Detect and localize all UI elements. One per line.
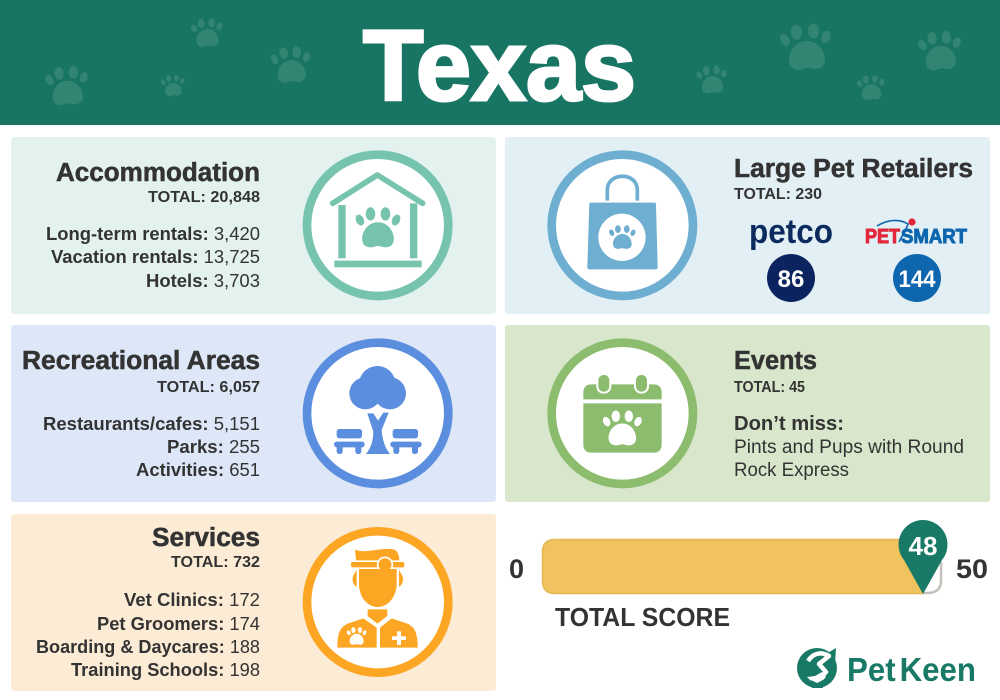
- logo: petsmart: SMART: [901, 226, 967, 248]
- logo mark: [797, 648, 837, 690]
- icon: tree and benches: [307, 343, 448, 484]
- icon: dog house: [307, 155, 448, 296]
- list: services: Training Schools: 198: [71, 659, 260, 680]
- score pin: [898, 520, 948, 594]
- list: accommodation: Long-term rentals: 3,420: [46, 223, 260, 244]
- heading: services: Services: [152, 524, 260, 552]
- panel: recreational areas: [11, 325, 496, 502]
- icon: shopping bag: [552, 155, 693, 296]
- logo: pet keen: [797, 648, 976, 690]
- list: services: [36, 589, 260, 680]
- heading: accommodation: Accommodation: [56, 159, 260, 187]
- label: total score: TOTAL SCORE: [555, 602, 730, 632]
- callout: don't miss: Pints and Pups with Round: [734, 437, 964, 458]
- background paw prints: [43, 17, 964, 106]
- heading: recreational areas: Recreational Areas: [22, 347, 260, 375]
- bar fill: [542, 540, 923, 594]
- callout: don't miss: Rock Express: [734, 460, 849, 481]
- list: recreational: [43, 413, 260, 480]
- scale maximum: 50: [956, 554, 988, 584]
- logo: petsmart: [865, 218, 967, 248]
- heading: large pet retailers: Large Pet Retailers: [734, 155, 973, 183]
- list: recreational: Activities: 651: [136, 459, 260, 480]
- score pin: 48: [909, 531, 937, 561]
- badge: petco count: 86: [778, 266, 804, 293]
- list: services: Pet Groomers: 174: [97, 613, 260, 634]
- panel: services: [11, 514, 496, 691]
- list: accommodation: [46, 223, 260, 291]
- logo wordmark: Pet Keen: [847, 651, 976, 688]
- callout: don't miss: [734, 413, 964, 481]
- icon: calendar: [552, 343, 693, 484]
- title: Texas: [363, 10, 636, 122]
- panel: large pet retailers: [505, 137, 990, 314]
- total: accommodation: TOTAL: 20,848: [148, 189, 260, 206]
- list: accommodation: Vacation rentals: 13,725: [51, 246, 260, 267]
- list: accommodation: Hotels: 3,703: [146, 270, 260, 291]
- total: recreational: TOTAL: 6,057: [157, 379, 260, 396]
- total: events: TOTAL: 45: [734, 379, 805, 396]
- header banner: [0, 0, 1000, 125]
- heading: events: Events: [734, 347, 817, 375]
- list: recreational: Parks: 255: [167, 436, 260, 457]
- list: services: Boarding & Daycares: 188: [36, 636, 260, 657]
- chart: total score bar: [509, 520, 988, 632]
- list: services: Vet Clinics: 172: [124, 589, 260, 610]
- list: recreational: Restaurants/cafes: 5,151: [43, 413, 260, 434]
- callout: don't miss: Don’t miss:: [734, 413, 844, 435]
- panel: accommodation: [11, 137, 496, 314]
- panel: events: [505, 325, 990, 502]
- icon: veterinarian: [307, 531, 448, 673]
- badge: petsmart count: 144: [898, 266, 936, 293]
- logo: petsmart: PET: [865, 226, 900, 248]
- badge: petco count: [767, 254, 815, 302]
- scale minimum: 0: [509, 554, 524, 584]
- bar track: [918, 562, 941, 593]
- total: retailers: TOTAL: 230: [734, 186, 822, 203]
- total: services: TOTAL: 732: [171, 554, 260, 571]
- badge: petsmart count: [893, 254, 941, 302]
- logo: petco: petco: [749, 213, 833, 251]
